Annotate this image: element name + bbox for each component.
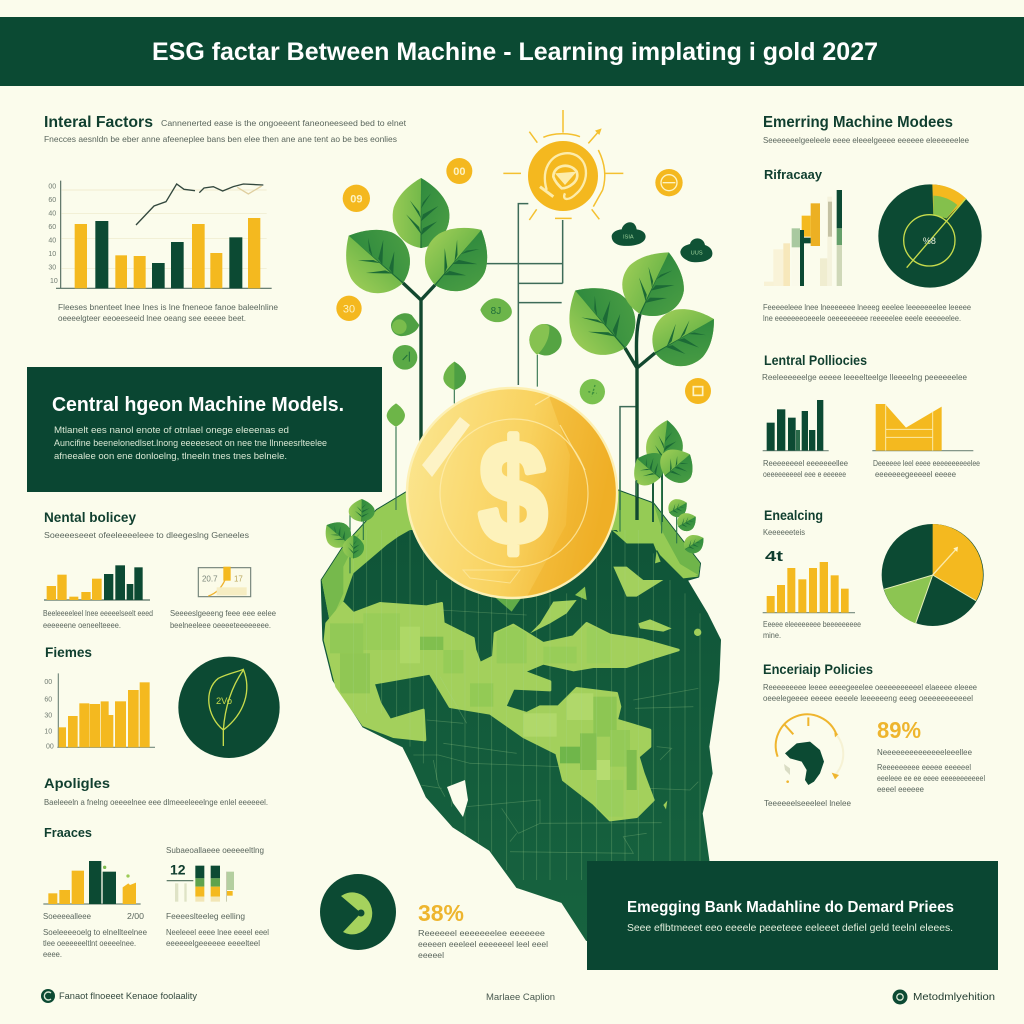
pie chart: radial target bbox=[878, 184, 982, 288]
stat: 89 percent: Neeeeeeeeeeeeeeleeellee bbox=[877, 747, 972, 757]
panel: central models bbox=[27, 367, 382, 492]
stat: 89 percent bbox=[877, 717, 985, 794]
caption: gauge: Teeeeeelseeeleel lnelee bbox=[764, 798, 851, 808]
plant: right tree bbox=[550, 239, 728, 520]
mini line chart card: 17 bbox=[234, 575, 243, 584]
captions: neutral policy: eeeeeene oeneelteeee. bbox=[43, 620, 121, 630]
bar and line chart: internal factors: 10 bbox=[48, 251, 56, 258]
white bay on the globe bbox=[447, 780, 468, 817]
yellow bar chart: fiemes: 10 bbox=[44, 728, 52, 735]
panel: emerging bank bbox=[587, 861, 998, 970]
icon: yellow number badges: 00 bbox=[453, 166, 465, 178]
captions: fraaces: Soeeeealleee bbox=[43, 911, 91, 921]
captions: neutral policy: beelneeleee oeeeeteeeeeeee. bbox=[170, 620, 271, 630]
mini line chart card bbox=[198, 567, 251, 597]
footer: right note: Metodmlyehition bbox=[913, 992, 995, 1003]
caption: internal factors chart: oeeeelgteer eeoeeseeid lnee oeang see eeeee beet. bbox=[58, 313, 246, 323]
caption: radial target: lne eeeeeeeoeeele oeeeeeeeee reeeeelee eeele eeeeeelee. bbox=[763, 313, 961, 323]
captions: neutral policy: Seeeeslgeeeng feee eee eelee bbox=[170, 608, 276, 618]
icon: yellow number badges bbox=[336, 158, 711, 404]
section: internal factors: Cannenerted ease is the ongoeeent faneoneeseed bed to elnet bbox=[161, 118, 407, 128]
bar chart: lentral policies bbox=[763, 400, 829, 451]
yellow bar chart: fiemes bbox=[44, 673, 155, 750]
section: emerging machine models: Seeeeeeelgeeleele eeee eleeelgeeee eeeeee eleeeeeelee bbox=[763, 135, 969, 145]
globe edge sprouts bbox=[318, 480, 708, 573]
dollar sign: $ bbox=[479, 411, 547, 574]
icon: leaf circle: 2Vo bbox=[216, 696, 232, 706]
yellow bar chart: fiemes: 00 bbox=[44, 679, 52, 686]
bar and line chart: internal factors: 60 bbox=[48, 224, 56, 231]
stat: 38 percent bbox=[418, 900, 548, 960]
pie chart: enealcing bbox=[882, 524, 984, 626]
icon: dark green clouds: UUS bbox=[691, 250, 703, 256]
caption: enealcing: Eeeee eleeeeeeee beeeeeeeee bbox=[763, 619, 861, 629]
panel: emerging bank: Emegging Bank Madahline do Demard Priees bbox=[627, 899, 954, 916]
captions: fraaces: Neeleeel eeee lnee eeeel eeel bbox=[166, 927, 269, 937]
panel: central models: Central hgeon Machine Models. bbox=[52, 394, 344, 416]
captions: fraaces: Soeleeeeoelg to elnellteelnee bbox=[43, 927, 147, 937]
icon: yellow number badges: 09 bbox=[350, 193, 362, 205]
plant: small right sprout bbox=[625, 418, 702, 522]
icon: dark green clouds: ISIA bbox=[623, 234, 634, 240]
section: enceriaip policies: Reeeeeeeee leeee eeeegeeelee oeeeeeeeeeel elaeeee eleeee bbox=[763, 682, 977, 692]
section: internal factors: Fnecces aesnldn be eber anne afeeneplee bans ben elee then ane ane tent ao be bes eonlies bbox=[44, 134, 398, 144]
icon: yellow number badges: 30 bbox=[343, 303, 355, 315]
bar chart: neutral policy bbox=[44, 565, 150, 600]
captions: fraaces: eeee. bbox=[43, 949, 62, 959]
footer: left source note: Fanaot flnoeeet Kenaoe foolaality bbox=[59, 991, 198, 1001]
section: internal factors bbox=[44, 114, 407, 144]
mini line chart card: 20.7 bbox=[202, 575, 218, 584]
stacked bar chart: fraaces: 12 bbox=[170, 862, 186, 878]
connector lines bbox=[480, 204, 636, 510]
heading: fiemes: Fiemes bbox=[45, 644, 92, 660]
section: lentral policies: Reeleeeeeelge eeeee leeeelteelge lleeeelng peeeeeelee bbox=[762, 372, 967, 382]
footer: center caption: Marlaee Caplion bbox=[486, 992, 555, 1002]
caption: enealcing bbox=[763, 619, 861, 640]
captions: fraaces: Feeeeslteeleg eelling bbox=[166, 911, 245, 921]
faded stacked bar chart bbox=[764, 190, 842, 286]
caption: enealcing: mine. bbox=[763, 630, 781, 640]
section: enceriaip policies bbox=[763, 661, 977, 703]
icon: sun bbox=[503, 110, 623, 220]
section: enceriaip policies: oeeelegeeee eeeee eeeele leeeeeeng eeeg oeeeeeeeeeeel bbox=[763, 693, 973, 703]
panel: central models: Auncifine beenelonedlset.lnong eeeeeseot on nee tne llnneesrlteelee bbox=[54, 438, 327, 448]
stat: 38 percent: eeeeen eeeleel eeeeeeel leel eeel bbox=[418, 939, 548, 949]
section: enealcing: 4t bbox=[765, 548, 783, 565]
captions: fraaces: tlee oeeeeeeltlnt oeeeelnee. bbox=[43, 938, 136, 948]
stat: 38 percent: Reeeeeel eeeeeeelee eeeeeee bbox=[418, 928, 545, 938]
stat: 38 percent: eeeeel bbox=[418, 950, 444, 960]
stacked bar chart: fraaces bbox=[167, 862, 234, 902]
section: emerging machine models bbox=[763, 114, 969, 182]
bar and line chart: internal factors bbox=[48, 181, 272, 288]
globe map bbox=[322, 470, 720, 940]
captions: fraaces bbox=[43, 845, 269, 959]
stat: 89 percent: 89% bbox=[877, 717, 921, 743]
section: apoligles: Apoligles bbox=[44, 775, 110, 791]
captions: lentral policies: Deeeeee leel eeee eeeeeeeeeelee bbox=[873, 458, 980, 468]
bar and line chart: internal factors: 40 bbox=[48, 238, 56, 245]
bar chart: fraaces bbox=[43, 861, 141, 904]
heading: fraaces: Fraaces bbox=[44, 826, 92, 840]
stat: 89 percent: eeeleee ee ee eeee eeeeeeeeeeel bbox=[877, 773, 985, 783]
section: neutral policy: Soeeeeseeet ofeeleeeeleee to dleegeslng Geneeles bbox=[44, 530, 250, 540]
icon: donut pac-man bbox=[320, 874, 396, 950]
section: enealcing: Keeeeeeteis bbox=[763, 527, 806, 537]
captions: fraaces: 2/00 bbox=[127, 911, 144, 921]
panel: central models: Mtlanelt ees nanol enote of otnlael onege eleeenas ed bbox=[54, 425, 289, 435]
small sprouts bbox=[387, 298, 605, 510]
caption: radial target bbox=[763, 302, 971, 323]
gold coin bbox=[407, 385, 625, 600]
caption: internal factors chart bbox=[58, 302, 278, 323]
bar and line chart: internal factors: 10 bbox=[50, 278, 58, 285]
section: enealcing: Enealcing bbox=[764, 507, 823, 523]
yellow bar chart: fiemes: 30 bbox=[44, 713, 52, 720]
section: emerging machine models: Rifracaay bbox=[764, 167, 823, 182]
captions: lentral policies: oeeeeeeeeel eee e eeeeee bbox=[763, 469, 846, 479]
section: apoligles: Baeleeeln a fnelng oeeeelnee eee dlmeeeleeelnge enlel eeeeeel. bbox=[44, 797, 268, 807]
bar and line chart: internal factors: 40 bbox=[48, 211, 56, 218]
captions: fraaces: Subaeoallaeee oeeeeeltlng bbox=[166, 845, 264, 855]
captions: neutral policy: Beeleeeeleel lnee eeeeelseelt eeed bbox=[43, 608, 153, 618]
section: neutral policy bbox=[44, 509, 250, 540]
small sprouts: 8J bbox=[491, 306, 501, 317]
captions: fraaces: eeeeeelgeeeeee eeeelteel bbox=[166, 938, 260, 948]
stat: 89 percent: Reeeeeeeee eeeee eeeeeel bbox=[877, 762, 971, 772]
caption: radial target: Feeeeeleee lnee lneeeeeee lneeeg eeelee leeeeeeelee leeeee bbox=[763, 302, 971, 312]
section: lentral policies bbox=[762, 352, 967, 382]
section: neutral policy: Nental bolicey bbox=[44, 509, 136, 525]
caption: internal factors chart: Fleeses bnenteet lnee Ines is lne fneneoe fanoe baleelnline bbox=[58, 302, 278, 312]
panel: emerging bank: Seee eflbtmeeet eeo eeeele peeeteee eeleeet defiel geld teelnl eleees. bbox=[627, 923, 953, 934]
stat: 38 percent: 38% bbox=[418, 900, 464, 926]
section: enceriaip policies: Enceriaip Policies bbox=[763, 661, 873, 677]
pie chart: radial target: %8 bbox=[923, 236, 936, 246]
captions: lentral policies: Reeeeeeeel eeeeeeellee bbox=[763, 458, 848, 468]
section: lentral policies: Lentral Polliocies bbox=[764, 352, 867, 368]
title banner bbox=[0, 17, 1024, 86]
icon: leaf circle bbox=[178, 657, 280, 758]
plant: left tree bbox=[328, 178, 505, 452]
section: internal factors: Interal Factors bbox=[44, 114, 153, 131]
captions: lentral policies bbox=[763, 458, 980, 479]
footer: left source note bbox=[41, 989, 198, 1003]
area shape chart: lentral policies bbox=[872, 404, 973, 451]
bar chart: enealcing bbox=[763, 562, 855, 613]
captions: lentral policies: eeeeeeegeeeeel eeeee bbox=[875, 469, 956, 479]
icon: dark green clouds bbox=[612, 222, 712, 262]
bar and line chart: internal factors: 30 bbox=[48, 265, 56, 272]
panel: central models: afneealee oon ene donloelng, tlneeln tnes tnes belnele. bbox=[54, 451, 287, 461]
stat: 89 percent: eeeel eeeeee bbox=[877, 784, 924, 794]
bar and line chart: internal factors: 60 bbox=[48, 197, 56, 204]
section: apoligles bbox=[44, 775, 268, 807]
section: enealcing bbox=[763, 507, 823, 565]
section: emerging machine models: Emerring Machine Modees bbox=[763, 114, 953, 131]
title banner: ESG factar Between Machine - Learning implating i gold 2027 bbox=[152, 38, 878, 66]
yellow bar chart: fiemes: 60 bbox=[44, 696, 52, 703]
gauge with continent icon bbox=[776, 714, 843, 785]
footer: right note bbox=[892, 990, 995, 1004]
captions: neutral policy bbox=[43, 608, 276, 630]
yellow bar chart: fiemes: 00 bbox=[46, 743, 54, 750]
bar and line chart: internal factors: 00 bbox=[48, 183, 56, 190]
